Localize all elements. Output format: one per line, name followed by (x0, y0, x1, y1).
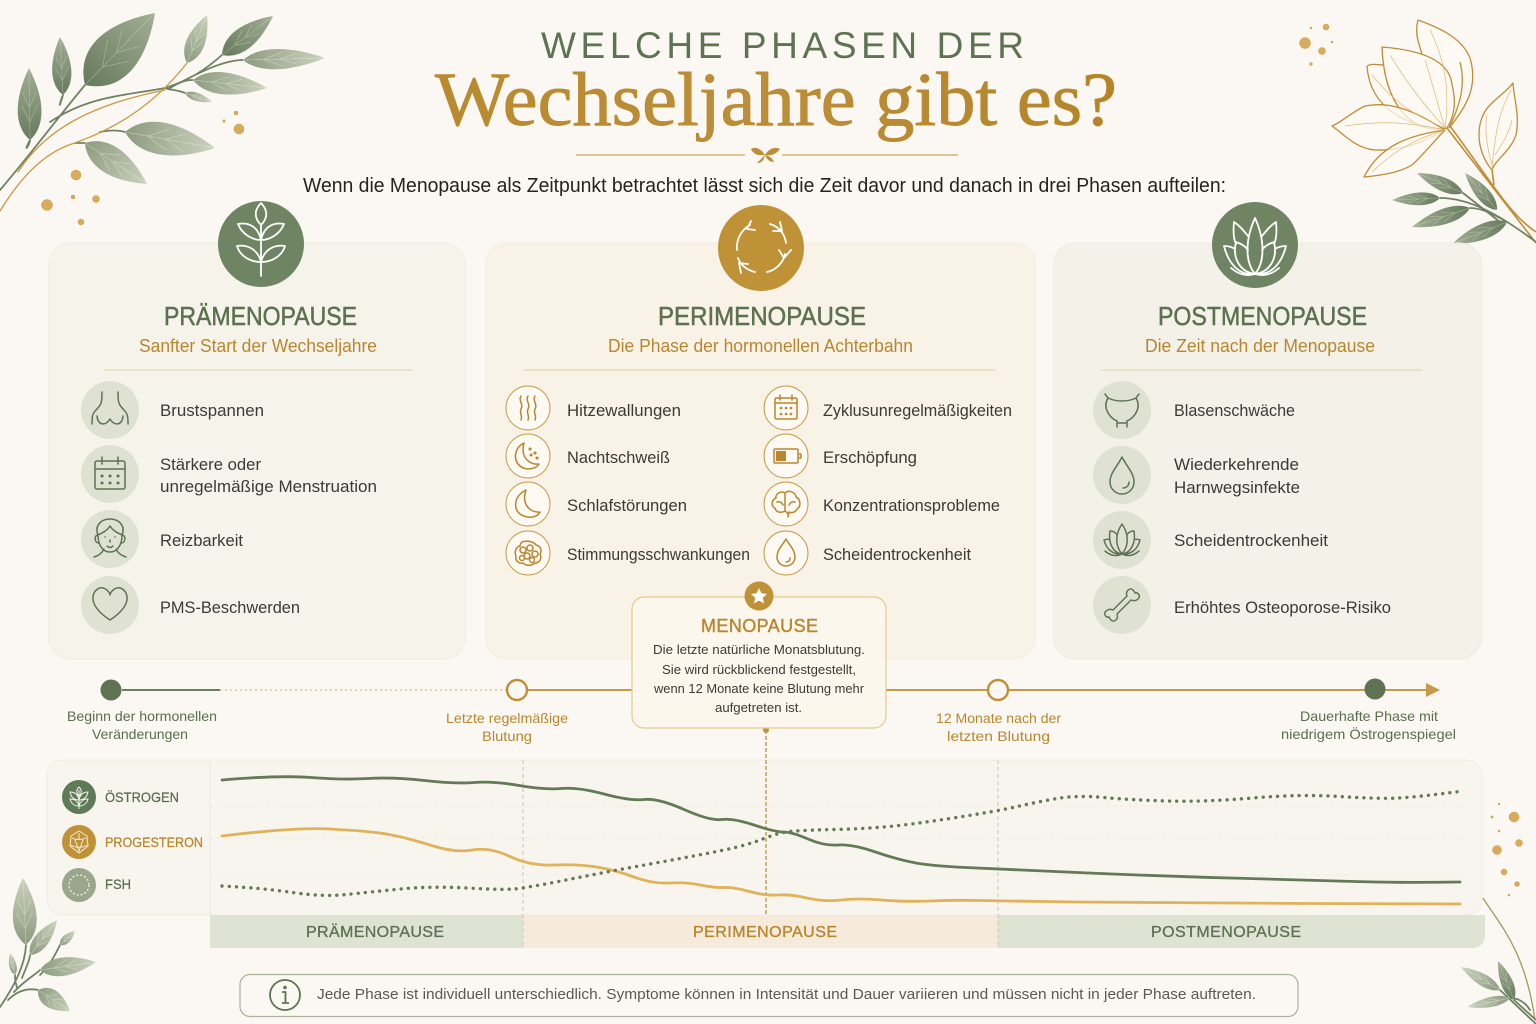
label: last regular bleeding (446, 710, 568, 744)
subtitle: Die Zeit nach der Menopause (1145, 336, 1375, 356)
label: permanent phase (1281, 708, 1456, 742)
symptom: Scheidentrockenheit (764, 531, 971, 575)
phase band: Prämenopause (210, 915, 523, 948)
title ornament (576, 148, 958, 163)
legend: Östrogen: ÖSTROGEN (105, 788, 179, 805)
title: Wechseljahre gibt es? (435, 58, 1117, 142)
symptom: Zyklusunregelmäßigkeiten (764, 386, 1012, 430)
legend: FSH: FSH (105, 876, 131, 892)
curve: estrogen (222, 777, 1460, 882)
symptom: Hitzewallungen: Hitzewallungen (567, 401, 681, 420)
phase band: Postmenopause (998, 915, 1485, 948)
legend: Östrogen (62, 780, 179, 814)
symptom: Blasenschwäche (1093, 381, 1295, 439)
symptom: PMS (81, 576, 300, 634)
symptom: Zyklusunregelmäßigkeiten: Zyklusunregelmäßigkeiten (823, 401, 1012, 420)
label: start: Veränderungen (92, 726, 188, 742)
phase band: Perimenopause: PERIMENOPAUSE (693, 924, 837, 941)
gold dots top-right (1300, 24, 1333, 66)
legend: FSH (62, 868, 131, 902)
label: permanent phase: Dauerhafte Phase mit (1300, 708, 1438, 724)
panel: Postmenopause (1054, 202, 1482, 659)
note box: Jede Phase ist individuell unterschiedlich. Symptome können in Intensität und Dauer variieren und müssen nicht in jeder Phase auftreten. (317, 986, 1256, 1003)
icon: lotus (1212, 202, 1298, 288)
heading: POSTMENOPAUSE (1158, 301, 1367, 331)
botanical: bottom-right sprig (1458, 898, 1536, 1024)
symptom: Nachtschweiß: Nachtschweiß (567, 448, 670, 467)
symptom: Schlafstörungen (506, 482, 687, 526)
label: 12 months: letzten Blutung (947, 728, 1050, 744)
label: 12 months: 12 Monate nach der (936, 710, 1061, 726)
note box (240, 974, 1298, 1016)
subtitle: Sanfter Start der Wechseljahre (139, 336, 377, 356)
symptom: Blasenschwäche: Blasenschwäche (1174, 401, 1295, 420)
icon: cycle (718, 205, 804, 291)
symptom: Menstruation: unregelmäßige Menstruation (160, 477, 377, 496)
divider (524, 369, 995, 371)
title (435, 25, 1117, 142)
label: last regular bleeding: Letzte regelmäßige (446, 710, 568, 726)
symptom: Konzentrationsprobleme: Konzentrationsprobleme (823, 496, 1000, 515)
symptom: Reizbarkeit (81, 510, 243, 568)
label: permanent phase: niedrigem Östrogenspiegel (1281, 725, 1456, 742)
menopause marker line (763, 727, 769, 915)
subtitle: Die Phase der hormonellen Achterbahn (608, 336, 913, 356)
symptom: Menstruation (81, 445, 377, 503)
intro text: Wenn die Menopause als Zeitpunkt betrachtet lässt sich die Zeit davor und danach in drei Phasen aufteilen: (303, 175, 1226, 197)
phase band: Prämenopause: PRÄMENOPAUSE (306, 923, 444, 941)
symptom: Konzentrationsprobleme (764, 482, 1000, 526)
icon: info (270, 980, 300, 1010)
symptom: Scheidentrockenheit: Scheidentrockenheit (1174, 531, 1328, 550)
legend: Progesteron (62, 825, 203, 859)
symptom: Scheidentrockenheit (1093, 511, 1328, 569)
body text: Die letzte natürliche Monatsblutung. (653, 642, 865, 657)
symptom: Harnwegsinfekte: Harnwegsinfekte (1174, 478, 1300, 497)
symptom: Scheidentrockenheit: Scheidentrockenheit (823, 545, 971, 564)
body text: Sie wird rückblickend festgestellt, (662, 662, 856, 677)
symptom: Reizbarkeit: Reizbarkeit (160, 531, 243, 550)
symptom: PMS: PMS-Beschwerden (160, 598, 300, 617)
marker: last regular bleeding (507, 680, 527, 700)
gold dots top-left (42, 111, 244, 225)
symptom: Brustspannen (81, 381, 264, 439)
symptom: Harnwegsinfekte: Wiederkehrende (1174, 455, 1299, 474)
arrow (1426, 683, 1440, 697)
symptom: Menstruation: Stärkere oder (160, 455, 261, 474)
body text: wenn 12 Monate keine Blutung mehr (653, 681, 865, 696)
callout: Menopause (632, 582, 886, 728)
symptom: Erschöpfung (764, 434, 917, 478)
body text (653, 642, 865, 715)
botanical: bottom-left sprig (0, 877, 97, 1019)
marker: 12 months (988, 680, 1008, 700)
gold dots right (1491, 803, 1522, 896)
symptom: Osteoporose (1093, 576, 1391, 634)
symptom: Nachtschweiß (506, 434, 670, 478)
botanical: top-left branch (0, 0, 325, 211)
label: start: Beginn der hormonellen (67, 708, 217, 724)
label: start (67, 708, 217, 742)
symptom: Brustspannen: Brustspannen (160, 401, 264, 420)
label: 12 months (936, 710, 1061, 744)
body text: aufgetreten ist. (715, 700, 802, 715)
curve: progesterone (222, 829, 1460, 904)
divider (1101, 369, 1422, 371)
symptom: Hitzewallungen (506, 386, 681, 430)
curve: FSH (222, 791, 1463, 895)
divider (104, 369, 412, 371)
icon: star badge (744, 582, 774, 610)
label: last regular bleeding: Blutung (482, 728, 532, 744)
symptom: Stimmungsschwankungen (506, 531, 750, 575)
symptom: Stimmungsschwankungen: Stimmungsschwankungen (567, 545, 750, 564)
timeline (67, 678, 1456, 744)
panel: Prämenopause (48, 201, 466, 659)
panel: Perimenopause (486, 205, 1036, 659)
symptom: Erschöpfung: Erschöpfung (823, 448, 917, 467)
icon: plant (218, 201, 304, 287)
title: WELCHE PHASEN DER (541, 25, 1024, 66)
botanical: top-right line flower (1332, 20, 1536, 251)
heading: PRÄMENOPAUSE (164, 301, 357, 331)
marker: start (100, 680, 122, 700)
legend: Progesteron: PROGESTERON (105, 834, 203, 850)
heading: MENOPAUSE (701, 616, 818, 636)
heading: PERIMENOPAUSE (658, 301, 866, 331)
hormone chart panel (47, 727, 1485, 948)
phase band: Perimenopause (523, 915, 998, 948)
symptom: Harnwegsinfekte (1093, 446, 1300, 504)
symptom: Schlafstörungen: Schlafstörungen (567, 496, 687, 515)
marker: permanent phase (1364, 678, 1386, 700)
symptom: Osteoporose: Erhöhtes Osteoporose-Risiko (1174, 598, 1391, 617)
phase band: Postmenopause: POSTMENOPAUSE (1151, 924, 1301, 941)
